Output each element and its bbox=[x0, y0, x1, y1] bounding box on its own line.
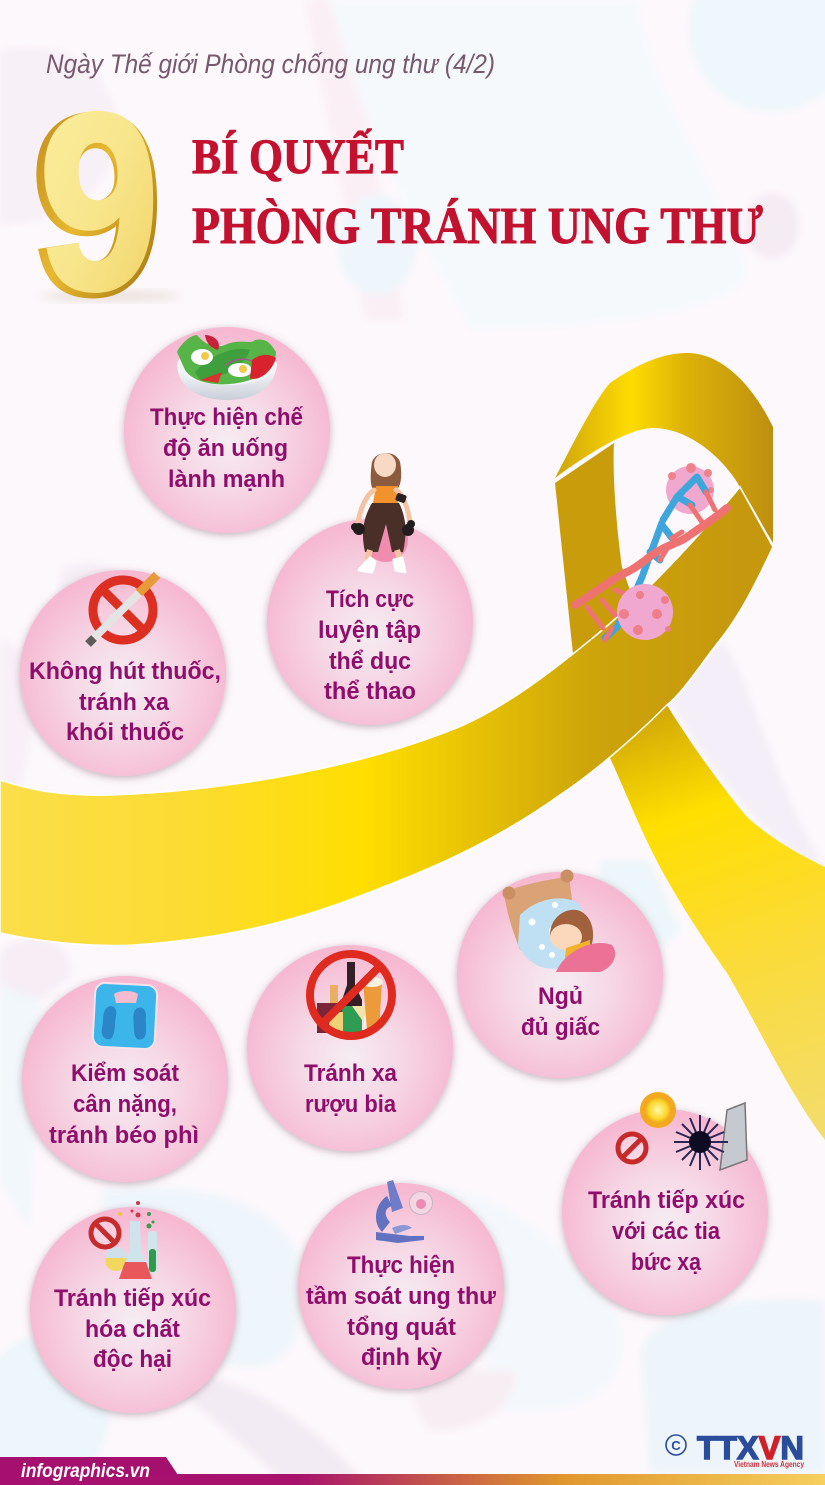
text: exercise bbox=[318, 586, 421, 705]
panel: exercise bbox=[267, 453, 473, 725]
gold ribbon bbox=[0, 353, 825, 1140]
panel: no smoking bbox=[20, 570, 226, 776]
text: sleep: Ngủ bbox=[538, 983, 583, 1010]
icon: salad bowl bbox=[177, 335, 277, 400]
text: avoid radiation: bức xạ bbox=[631, 1249, 702, 1276]
text: sleep: đủ giấc bbox=[521, 1014, 600, 1041]
text: no smoking: tránh xa bbox=[79, 689, 170, 716]
logo: TTXVN: TTXVN bbox=[697, 1430, 804, 1466]
text: avoid radiation bbox=[588, 1187, 745, 1276]
text: no smoking: khói thuốc bbox=[66, 719, 184, 746]
heading: PHÒNG TRÁNH UNG THƯ bbox=[192, 197, 763, 255]
text: screening: định kỳ bbox=[361, 1344, 443, 1371]
panel: sleep bbox=[457, 870, 663, 1078]
text: avoid radiation: Tránh tiếp xúc bbox=[588, 1187, 745, 1214]
panel: screening bbox=[298, 1180, 504, 1389]
text: screening bbox=[306, 1252, 497, 1371]
text: healthy diet: Thực hiện chế bbox=[150, 404, 304, 431]
text: avoid chemicals: hóa chất bbox=[85, 1316, 180, 1343]
text: exercise: thể thao bbox=[324, 678, 416, 705]
footer bar with site tab bbox=[0, 1457, 825, 1485]
icon: no smoking sign bbox=[88, 575, 157, 644]
text: avoid alcohol: Tránh xa bbox=[304, 1060, 398, 1087]
text: screening: tổng quát bbox=[347, 1314, 456, 1341]
text: avoid chemicals bbox=[54, 1285, 211, 1373]
text: exercise: Tích cực bbox=[326, 586, 414, 613]
big gold number 9: 9 bbox=[39, 62, 159, 341]
icon: no alcohol sign bbox=[310, 954, 392, 1036]
footer bar with site tab: infographics.vn bbox=[21, 1461, 150, 1482]
text: weight control: cân nặng, bbox=[73, 1091, 177, 1118]
text: avoid alcohol bbox=[304, 1060, 398, 1118]
heading: BÍ QUYẾT bbox=[192, 127, 404, 184]
icon: sun, radiation burst and phone bbox=[618, 1092, 747, 1170]
icon: microscope and cell bbox=[376, 1180, 432, 1243]
text: weight control: tránh béo phì bbox=[49, 1122, 199, 1149]
icon: chemical flasks bbox=[91, 1201, 157, 1279]
text: screening: Thực hiện bbox=[347, 1252, 455, 1279]
logo: TTXVN: Vietnam News Agency bbox=[734, 1460, 804, 1469]
panel: avoid chemicals bbox=[30, 1201, 236, 1413]
text: avoid chemicals: Tránh tiếp xúc bbox=[54, 1285, 211, 1312]
panel: healthy diet bbox=[124, 327, 330, 533]
text: healthy diet: lành mạnh bbox=[168, 466, 285, 493]
text: exercise: thể dục bbox=[329, 648, 411, 675]
logo: TTXVN: C bbox=[671, 1438, 681, 1453]
panel: avoid radiation bbox=[562, 1092, 768, 1315]
icon: sleeping girl in bed bbox=[502, 870, 615, 972]
subtitle: Ngày Thế giới Phòng chống ung thư (4/2) bbox=[46, 49, 495, 79]
panel: weight control bbox=[22, 976, 228, 1182]
big gold number 9: 9 bbox=[33, 65, 161, 344]
icon: girl exercising on ball bbox=[351, 453, 415, 572]
text: sleep bbox=[521, 983, 600, 1041]
icon: bathroom scale bbox=[92, 982, 158, 1050]
text: avoid chemicals: độc hại bbox=[93, 1346, 172, 1373]
text: healthy diet: độ ăn uống bbox=[163, 435, 288, 462]
panel: avoid alcohol bbox=[247, 945, 453, 1151]
heading bbox=[192, 127, 763, 255]
text: screening: tầm soát ung thư bbox=[306, 1283, 497, 1310]
text: avoid radiation: với các tia bbox=[612, 1218, 721, 1245]
text: healthy diet bbox=[150, 404, 304, 493]
text: no smoking: Không hút thuốc, bbox=[29, 658, 221, 685]
text: avoid alcohol: rượu bia bbox=[305, 1091, 397, 1118]
text: exercise: luyện tập bbox=[318, 617, 421, 644]
text: weight control bbox=[49, 1060, 199, 1149]
icon: DNA strand with cancer cells bbox=[575, 463, 727, 640]
text: no smoking bbox=[29, 658, 221, 746]
text: weight control: Kiểm soát bbox=[71, 1060, 179, 1087]
